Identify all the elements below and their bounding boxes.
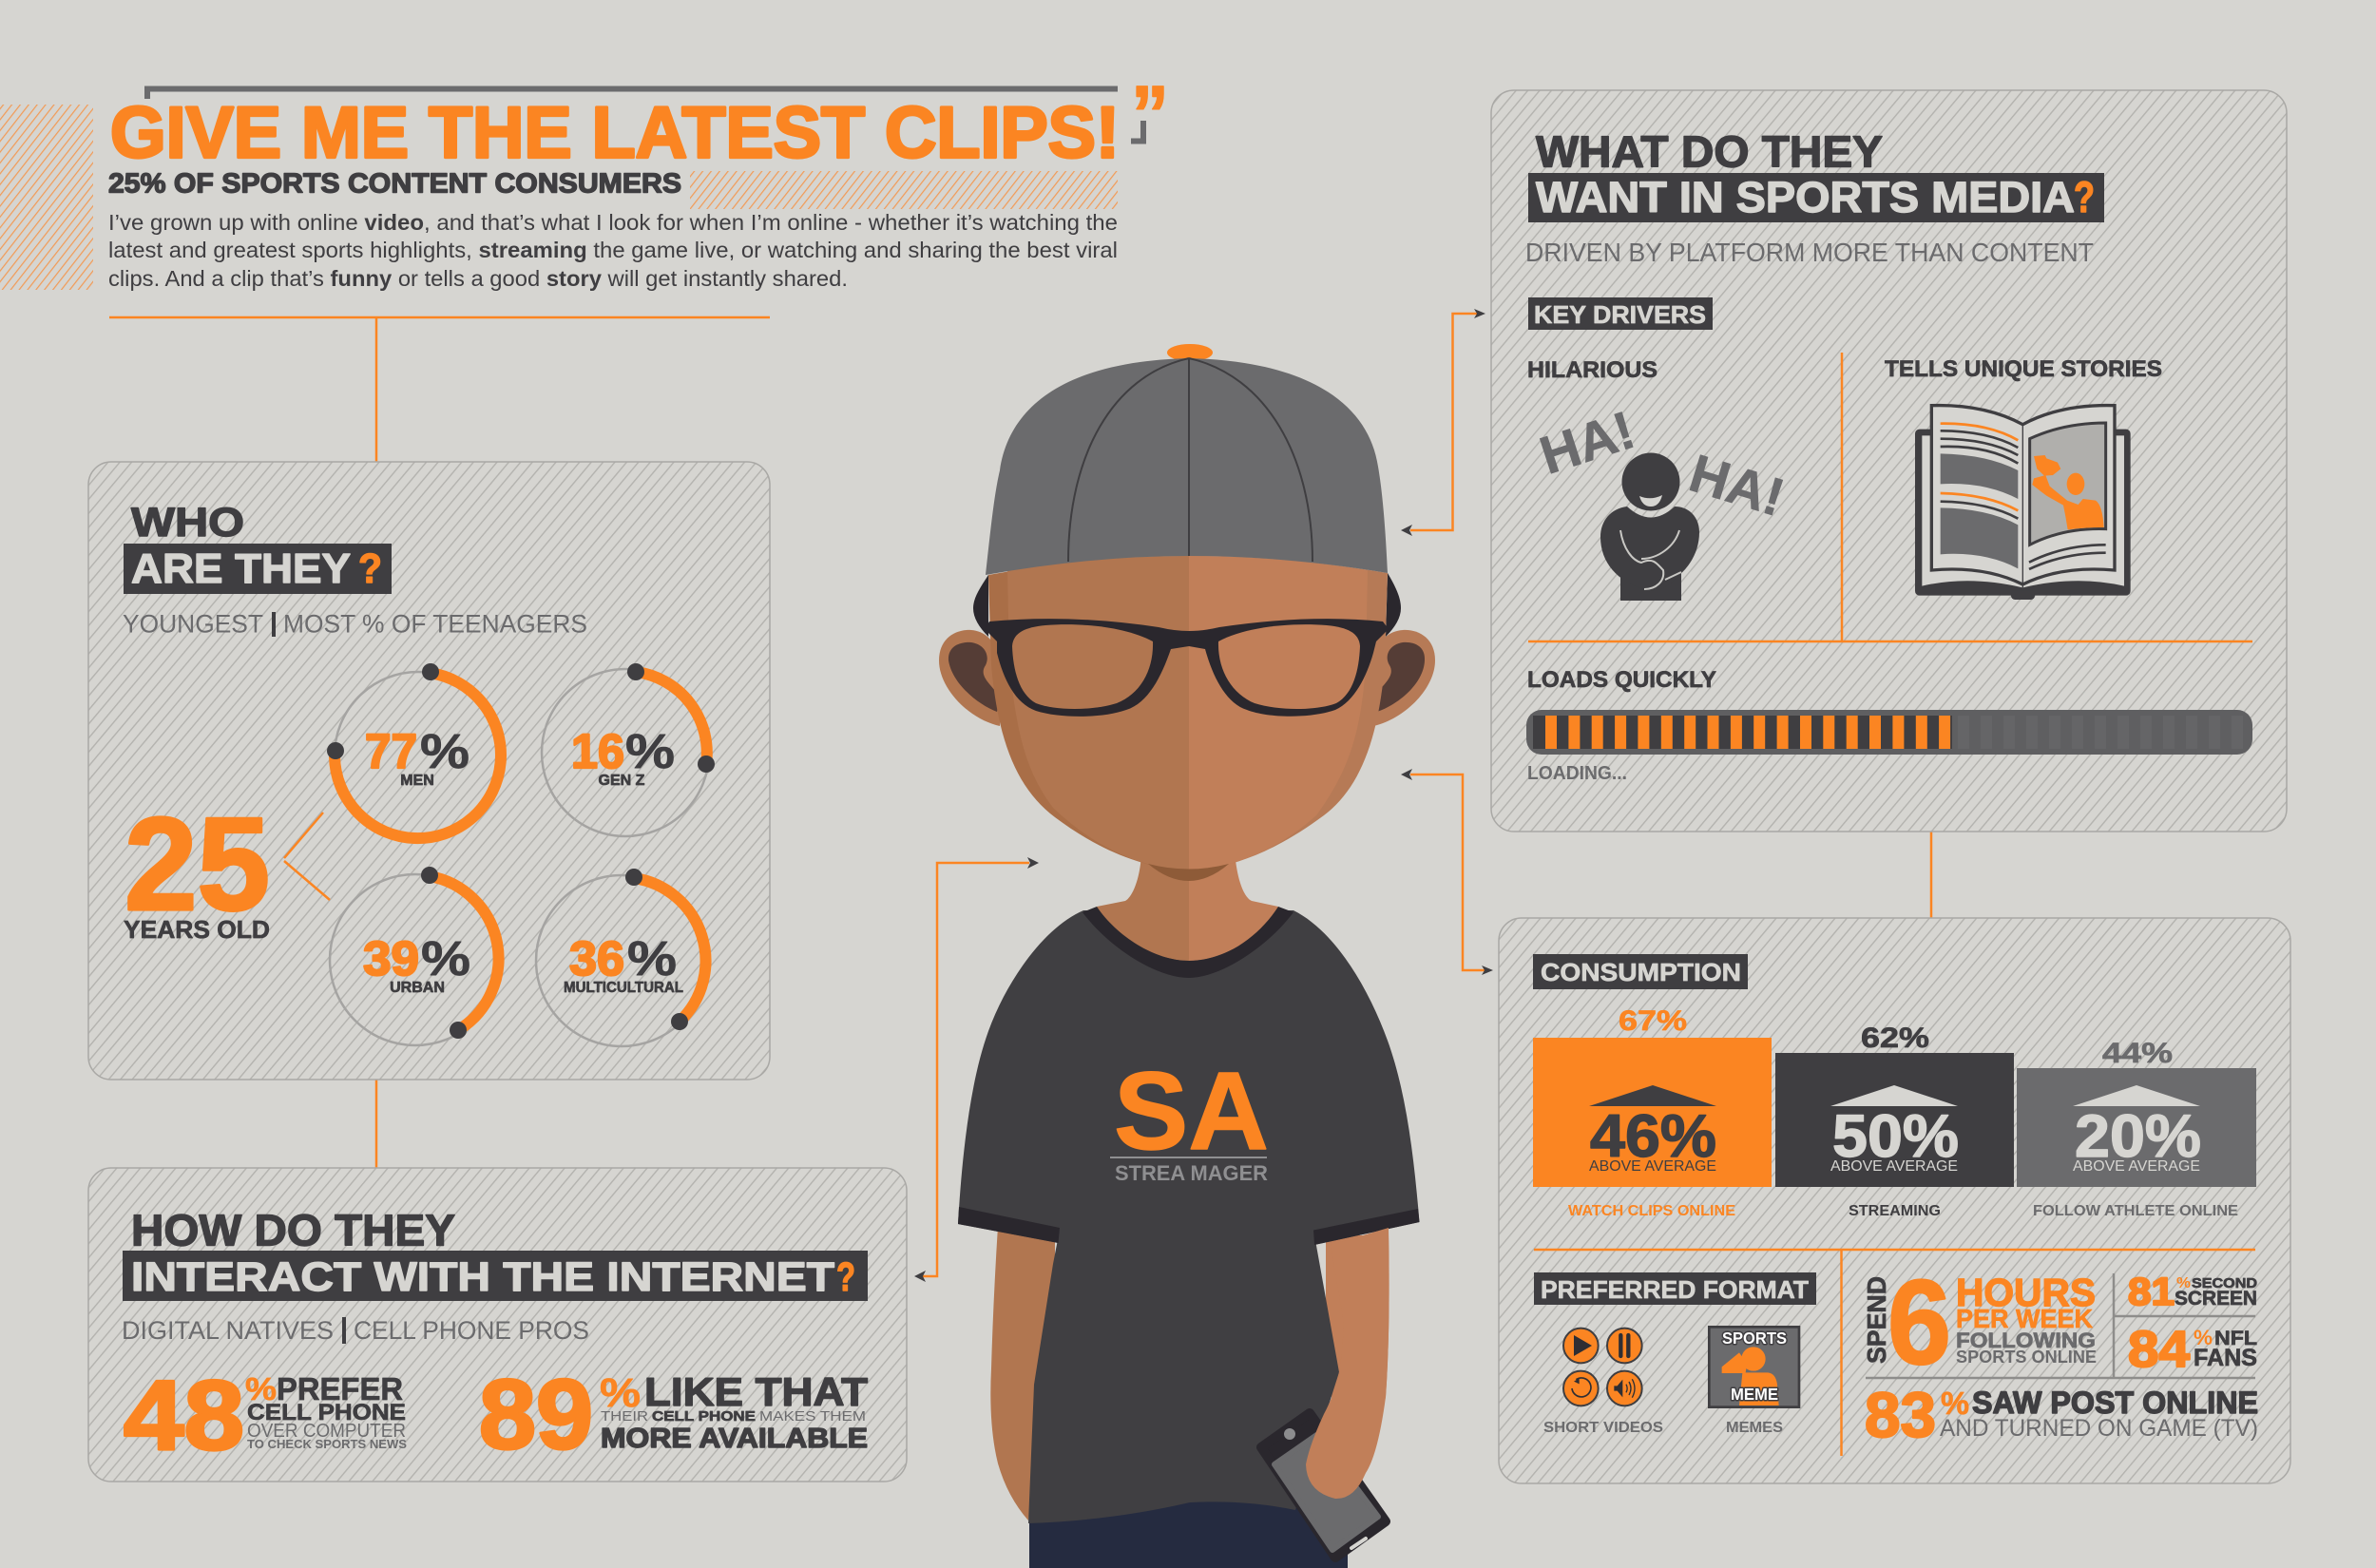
hair	[973, 573, 1401, 637]
panel: how do they interact with the internet	[88, 1168, 907, 1482]
stat: spend 6 hours per week: SPEND	[1862, 1276, 1891, 1364]
ring chart: 39% urban: 39	[363, 931, 419, 985]
stat: 89% like that: 89	[479, 1360, 593, 1470]
stat: 48% prefer cell phone: CELL PHONE	[247, 1400, 406, 1425]
icon: sports meme: MEME	[1731, 1385, 1778, 1404]
stat: 25 years old	[124, 791, 330, 944]
stat: 89% like that	[479, 1360, 868, 1470]
right arm behind phone	[1326, 1235, 1389, 1463]
bar: watch clips online: ABOVE AVERAGE	[1589, 1158, 1716, 1175]
stat: 25 years old: YEARS OLD	[124, 915, 270, 944]
stat: spend 6 hours per week: 6	[1887, 1255, 1951, 1389]
driver: hilarious	[1527, 357, 1792, 601]
face	[988, 556, 1388, 881]
subtitle: 25% OF SPORTS CONTENT CONSUMERS	[108, 169, 681, 200]
stat: 83% saw post online: %	[1941, 1386, 1969, 1421]
dividers	[1534, 1250, 2255, 1456]
intro text: I’ve grown up with online video, and that’s what I look for when I’m online - whether it’s watching the	[108, 210, 1118, 235]
icon: trophy winner	[2032, 455, 2104, 529]
stat: 83% saw post online	[1865, 1380, 2258, 1451]
cap	[986, 344, 1388, 575]
icon: sports meme: SPORTS	[1722, 1329, 1787, 1348]
stat: 81% second screen	[2128, 1270, 2257, 1313]
logo: SA streamager: SA	[1114, 1049, 1269, 1173]
glasses	[985, 619, 1389, 717]
driver: tells unique stories: TELLS UNIQUE STORIES	[1885, 356, 2162, 382]
bar: follow athlete online: 20%	[2075, 1103, 2201, 1170]
stat: 48% prefer cell phone	[124, 1361, 407, 1471]
progress bar	[1526, 710, 2252, 755]
arrow: consumption panel to head	[1401, 769, 1493, 975]
heading: what do they want	[1528, 127, 2104, 222]
subheading: MOST % OF TEENAGERS	[283, 610, 587, 639]
stat: 48% prefer cell phone: OVER COMPUTER	[247, 1421, 406, 1442]
subheading	[122, 1316, 589, 1345]
connector lines: left column	[109, 317, 1931, 1168]
ring chart: 39% urban	[330, 867, 501, 1045]
stat: 48% prefer cell phone: %	[245, 1371, 277, 1406]
icon: sports meme: MEMES	[1726, 1420, 1783, 1436]
ring chart: 77% men	[327, 663, 502, 839]
stat: 48% prefer cell phone: 48	[124, 1361, 244, 1471]
driver: hilarious: HILARIOUS	[1527, 357, 1657, 383]
ring chart: 77% men: %	[420, 724, 469, 778]
stat: 89% like that: MAKES THEM	[759, 1408, 866, 1425]
intro text: clips. And a clip that’s funny or tells a good story will get instantly shared.	[108, 266, 848, 291]
icon: open book	[1915, 406, 2131, 600]
stat: spend 6 hours per week: PER WEEK	[1956, 1304, 2093, 1333]
neck	[1097, 860, 1189, 961]
ring chart: 77% men: 77	[365, 724, 417, 778]
stat: 81% second screen: SCREEN	[2175, 1288, 2257, 1310]
icon: short video controls	[1543, 1329, 1663, 1436]
dividers	[1528, 353, 2252, 641]
ring chart: 16% gen z: 16	[571, 724, 624, 778]
hand	[1306, 1228, 1389, 1499]
bar: streaming: STREAMING	[1849, 1203, 1941, 1219]
chin shadow	[1148, 864, 1229, 881]
header: title block	[0, 69, 1169, 291]
panel: consumption	[1499, 918, 2290, 1483]
stat: spend 6 hours per week	[1862, 1255, 2097, 1389]
ring chart: 16% gen z	[542, 663, 715, 836]
bar: streaming: 50%	[1832, 1103, 1959, 1170]
stat: 89% like that: THEIR	[601, 1408, 648, 1425]
panel: what do they want in sports media	[1491, 90, 2287, 832]
stat: 89% like that: LIKE THAT	[644, 1369, 868, 1414]
quote mark: ”	[1131, 69, 1169, 159]
driver: loads quickly: LOADS QUICKLY	[1527, 667, 1716, 693]
heading: how do they interact: INTERACT WITH THE INTERNET	[131, 1254, 834, 1300]
logo: SA streamager: STREA MAGER	[1115, 1161, 1268, 1185]
bar: follow athlete online: FOLLOW ATHLETE ONLINE	[2033, 1203, 2238, 1219]
stat: 83% saw post online: SAW POST ONLINE	[1972, 1386, 2258, 1420]
label: consumption: CONSUMPTION	[1541, 958, 1741, 986]
bar: watch clips online	[1533, 1005, 1772, 1219]
subheading: CELL PHONE PROS	[354, 1316, 589, 1345]
ring chart: 36% multicultural	[536, 869, 707, 1046]
label: preferred format: PREFERRED FORMAT	[1541, 1275, 1809, 1304]
heading: who are they: WHO	[131, 500, 244, 545]
bar: watch clips online: 67%	[1619, 1005, 1687, 1037]
stat: 83% saw post online: AND TURNED ON GAME (TV)	[1940, 1415, 2258, 1442]
stat: 81% second screen: %	[2176, 1275, 2191, 1291]
icon: short video controls: SHORT VIDEOS	[1543, 1420, 1663, 1436]
heading: what do they want: WHAT DO THEY	[1536, 127, 1883, 177]
pants	[1029, 1492, 1348, 1568]
bar: watch clips online: WATCH CLIPS ONLINE	[1568, 1203, 1735, 1219]
bar: streaming	[1775, 1023, 2014, 1219]
heading: what do they want: ?	[2074, 173, 2095, 221]
heading: what do they want: WANT IN SPORTS MEDIA	[1536, 173, 2075, 221]
heading: who are they: ARE THEY	[131, 545, 351, 592]
stat: spend 6 hours per week: SPORTS ONLINE	[1956, 1348, 2097, 1367]
driver: loads quickly	[1526, 667, 2252, 784]
ring chart: 36% multicultural: %	[627, 931, 677, 985]
stat: 48% prefer cell phone: TO CHECK SPORTS NEWS	[247, 1437, 407, 1451]
title: GIVE ME THE LATEST CLIPS!	[110, 93, 1120, 173]
icon: laughing person: HA!	[1533, 399, 1641, 486]
collar	[1083, 907, 1293, 978]
left arm	[990, 1226, 1055, 1520]
ring chart: 36% multicultural: 36	[569, 931, 624, 985]
stat: 89% like that: MORE AVAILABLE	[601, 1424, 868, 1454]
icon: sports meme	[1709, 1327, 1799, 1436]
stat: 48% prefer cell phone: PREFER	[277, 1371, 403, 1406]
stat: 89% like that: CELL PHONE	[652, 1408, 756, 1425]
label: key drivers: KEY DRIVERS	[1534, 300, 1706, 329]
stat: spend 6 hours per week: FOLLOWING	[1956, 1329, 2096, 1352]
subheading: YOUNGEST	[123, 610, 263, 639]
subheading: DRIVEN BY PLATFORM MORE THAN CONTENT	[1525, 238, 2094, 267]
ring chart: 36% multicultural: MULTICULTURAL	[564, 980, 683, 996]
arrow: want panel to head	[1401, 309, 1485, 536]
icon: laughing person	[1533, 399, 1792, 601]
character: streamer figure	[939, 344, 1435, 1568]
subheading: DIGITAL NATIVES	[122, 1316, 334, 1345]
bar: follow athlete online	[2017, 1038, 2256, 1219]
bar: streaming: ABOVE AVERAGE	[1830, 1158, 1958, 1175]
stat: spend 6 hours per week: HOURS	[1956, 1271, 2096, 1314]
bar: follow athlete online: 44%	[2102, 1038, 2173, 1069]
phone	[1261, 1413, 1386, 1558]
title bracket	[147, 89, 1143, 141]
heading: who are they: ?	[358, 545, 382, 592]
ears	[939, 630, 1435, 726]
stat: 89% like that: %	[600, 1370, 641, 1416]
icon: laughing person: HA!	[1683, 443, 1792, 527]
subheading	[123, 610, 587, 639]
driver: loads quickly: LOADING...	[1527, 763, 1627, 784]
intro text	[108, 210, 1118, 291]
stat: 84% nfl fans: %	[2194, 1326, 2213, 1349]
stat: 84% nfl fans: 84	[2128, 1321, 2190, 1378]
t-shirt	[958, 910, 1420, 1523]
arrow: internet panel to figure	[914, 857, 1039, 1282]
ring chart: 39% urban: URBAN	[390, 980, 445, 996]
ring chart: 16% gen z: %	[625, 724, 675, 778]
bar: watch clips online: 46%	[1590, 1103, 1716, 1170]
stat: 84% nfl fans: NFL	[2214, 1328, 2257, 1349]
ring chart: 16% gen z: GEN Z	[599, 773, 645, 789]
heading: how do they interact: ?	[836, 1254, 855, 1300]
ring chart: 39% urban: %	[421, 931, 470, 985]
heading: who are they	[124, 500, 392, 594]
stat: 25 years old: 25	[125, 791, 270, 938]
intro text: latest and greatest sports highlights, streaming the game live, or watching and sharing the best viral	[108, 238, 1118, 262]
ring chart: 77% men: MEN	[400, 773, 434, 789]
heading: how do they interact	[123, 1205, 868, 1301]
driver: tells unique stories	[1885, 356, 2162, 600]
stat: 81% second screen: SECOND	[2192, 1275, 2257, 1291]
sleeve bands	[958, 1207, 1420, 1245]
stat: 81% second screen: 81	[2128, 1270, 2175, 1313]
panel: who are they	[88, 462, 770, 1080]
heading: how do they interact: HOW DO THEY	[131, 1205, 455, 1254]
stat: 83% saw post online: 83	[1865, 1380, 1936, 1451]
bar: follow athlete online: ABOVE AVERAGE	[2073, 1158, 2200, 1175]
stat: 84% nfl fans: FANS	[2194, 1345, 2257, 1371]
stat: 84% nfl fans	[2128, 1321, 2257, 1378]
label: consumption	[1533, 954, 1748, 989]
bar: streaming: 62%	[1861, 1023, 1929, 1054]
